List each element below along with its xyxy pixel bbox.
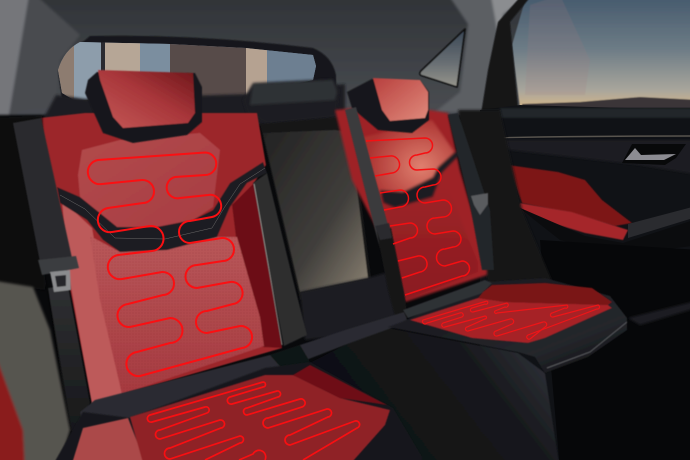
door panel — [480, 105, 690, 460]
left far pillar and door dark — [0, 116, 90, 433]
upper insert — [78, 133, 220, 227]
right cushion rear — [478, 283, 612, 305]
left seat back — [40, 113, 282, 404]
seat rail — [628, 300, 690, 325]
right seat back — [335, 108, 487, 302]
heating element: left backrest — [88, 152, 252, 376]
window switch panel — [628, 205, 690, 238]
seam stitching — [60, 168, 265, 239]
left seat cross bar — [80, 312, 408, 435]
quarter window — [420, 29, 465, 87]
armrest — [518, 203, 628, 240]
cushion side piece — [70, 418, 148, 460]
headliner — [0, 0, 530, 115]
right lower wing — [232, 183, 282, 348]
center seat base — [300, 328, 560, 460]
left lower wing — [62, 200, 122, 404]
heating element: right backrest — [366, 138, 470, 295]
right cushion bolster — [388, 278, 627, 373]
outer right seat belt — [448, 113, 494, 270]
right cushion — [410, 283, 612, 343]
front seat side — [0, 280, 70, 460]
left right-bolster — [253, 173, 307, 346]
upper insert — [360, 120, 454, 205]
lower insert — [385, 173, 478, 300]
rear window — [58, 35, 336, 100]
rocker gap — [458, 110, 575, 335]
lower insert — [90, 236, 264, 394]
B pillar — [480, 0, 532, 120]
front door window — [512, 0, 690, 108]
cushion main — [130, 375, 390, 460]
black seam band — [57, 162, 267, 252]
center armrest panel — [260, 117, 372, 300]
belt latch — [38, 256, 79, 292]
left cushion — [70, 365, 390, 460]
heating element: right cushion — [422, 301, 600, 339]
rear shelf — [40, 84, 345, 125]
right buckle — [471, 193, 488, 215]
door handle — [622, 144, 686, 165]
door trim line — [486, 136, 690, 138]
belt buckle — [375, 223, 392, 240]
C pillar — [435, 0, 535, 112]
right seat cross bar — [403, 280, 492, 318]
black seam — [380, 150, 460, 208]
center headrest — [243, 79, 339, 124]
center lower back — [300, 270, 402, 340]
right cushion front — [410, 298, 612, 343]
heating element: left cushion — [147, 382, 360, 460]
right seat belt — [345, 107, 408, 320]
cushion rear dark panel — [293, 365, 387, 405]
right headrest — [347, 78, 429, 133]
left headrest — [85, 70, 202, 143]
wing panels — [40, 113, 282, 404]
left cushion bolster — [50, 362, 422, 460]
left seat belt — [13, 118, 90, 433]
door red panel — [508, 165, 632, 226]
